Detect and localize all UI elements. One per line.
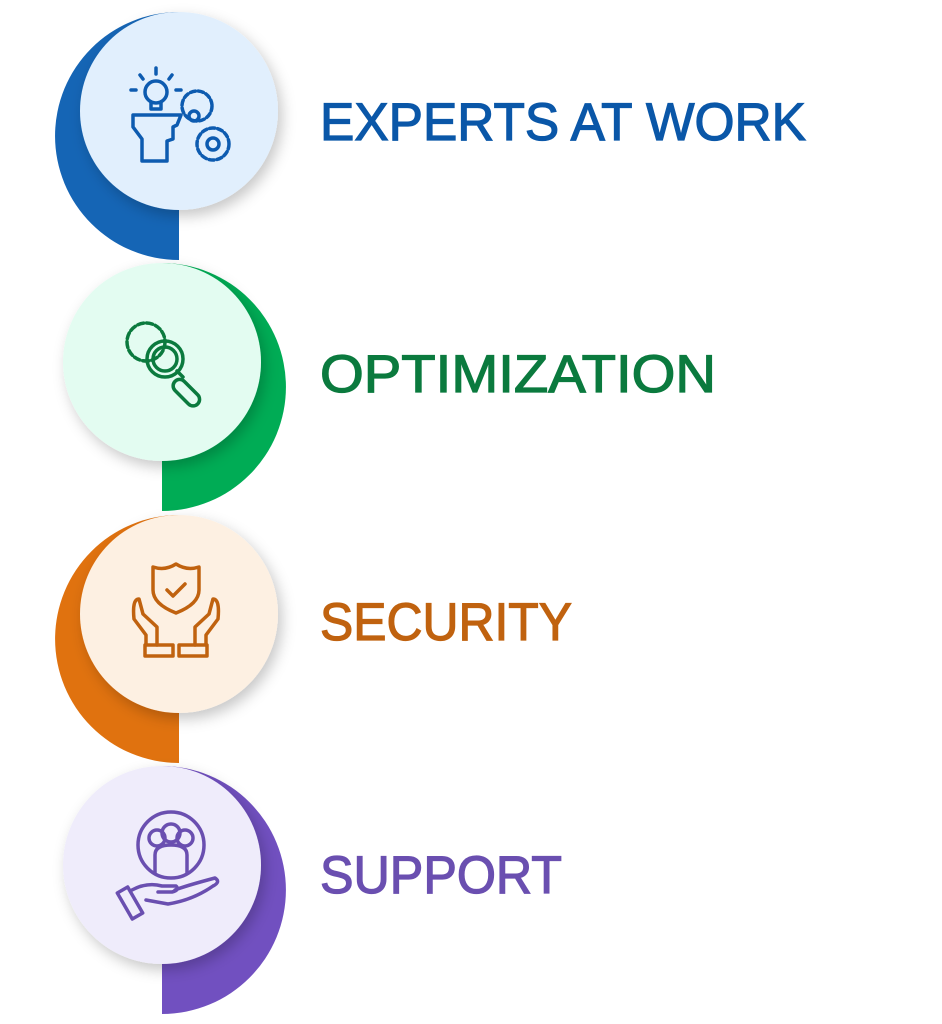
shape: blue half disc (55, 12, 179, 260)
shape: orange half disc (55, 515, 179, 763)
item 4: support (63, 766, 562, 1014)
icon: hand holding people (117, 812, 218, 919)
item 3: security (55, 515, 572, 763)
circle: light blue (80, 12, 278, 210)
title: support: SUPPORT (320, 846, 562, 905)
item 1: experts at work (55, 12, 806, 260)
item 2: optimization (63, 263, 716, 511)
circle: light purple (63, 766, 261, 964)
shape: purple half disc (162, 766, 286, 1014)
icon: hands holding shield (134, 564, 218, 656)
circle: light green (63, 263, 261, 461)
shape: green half disc (162, 263, 286, 511)
icon: idea head with gears (131, 68, 229, 161)
circle: light orange (80, 515, 278, 713)
title: optimization: OPTIMIZATION (320, 345, 716, 404)
title: experts at work: EXPERTS AT WORK (320, 93, 806, 152)
title: security: SECURITY (320, 593, 572, 652)
icon: gear with magnifier (127, 323, 202, 409)
